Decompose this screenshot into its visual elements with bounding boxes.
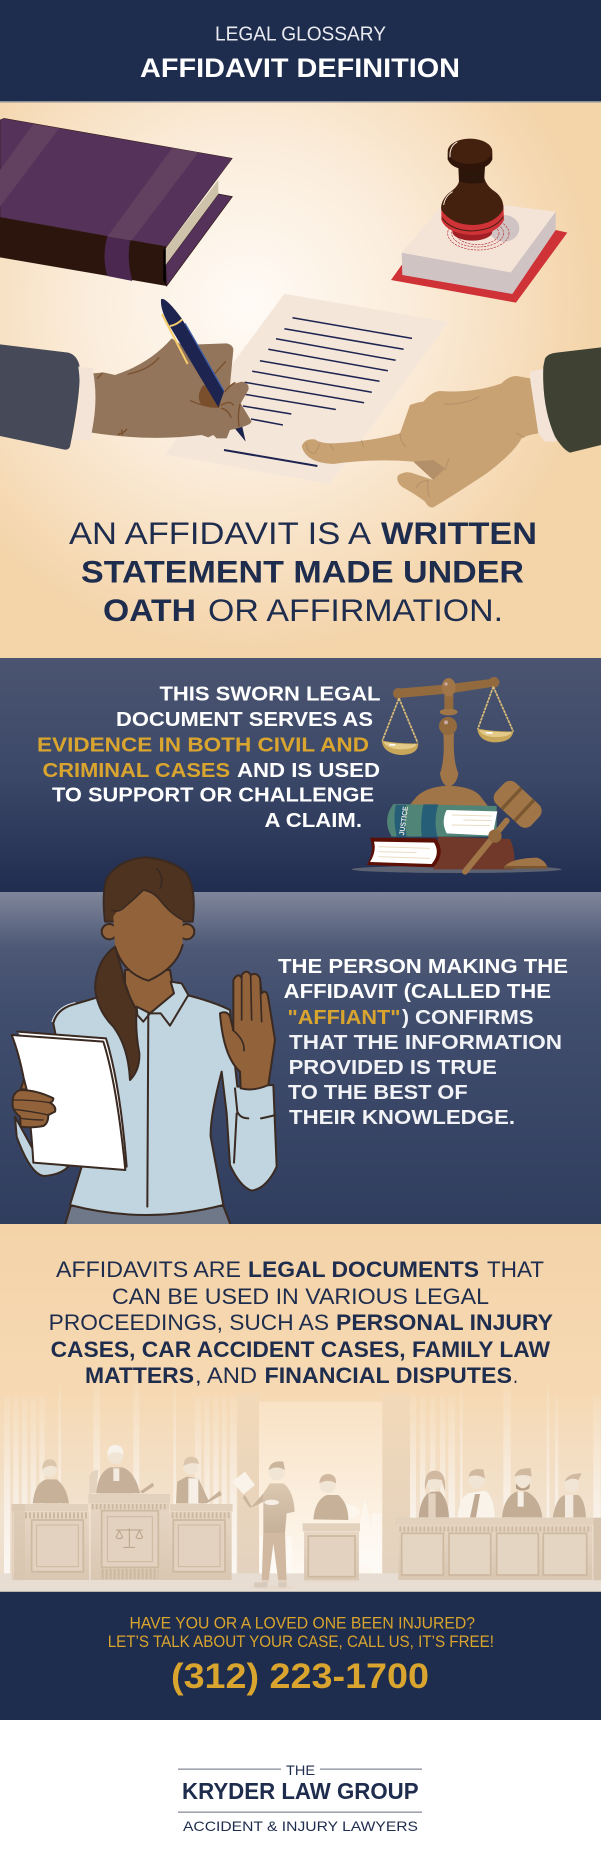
icon: pointing hand xyxy=(302,347,601,507)
statement text: STATEMENT MADE UNDER xyxy=(81,554,524,590)
illustration: courtroom xyxy=(0,1383,601,1592)
text block: the affiant: ) xyxy=(402,1006,409,1029)
statement text: OATH xyxy=(103,592,196,628)
text block: uses of affidavits: PROCEEDINGS, SUCH AS xyxy=(49,1310,329,1335)
text block: sworn document xyxy=(37,683,380,832)
text block: sworn document: DOCUMENT SERVES AS xyxy=(116,708,373,731)
panel: footer logo xyxy=(0,1720,601,1875)
text block: the affiant: THAT THE INFORMATION xyxy=(289,1031,562,1054)
logo: the kryder law group: ACCIDENT & INJURY LAWYERS xyxy=(183,1818,418,1834)
text block: uses of affidavits: AFFIDAVITS ARE xyxy=(56,1257,241,1282)
text block: sworn document: THIS SWORN LEGAL xyxy=(160,683,380,706)
courtroom architecture xyxy=(0,1383,601,1592)
text block: uses of affidavits: THAT xyxy=(487,1257,544,1282)
icon: scales of justice, books and gavel xyxy=(352,677,562,873)
cta invitation: LET’S TALK ABOUT YOUR CASE, CALL US, IT’S FREE! xyxy=(108,1632,494,1651)
text block: uses of affidavits: CASES, CAR ACCIDENT CASES, FAMILY LAW xyxy=(51,1337,551,1362)
text block: uses of affidavits: , AND xyxy=(195,1363,257,1388)
statement text: OR AFFIRMATION. xyxy=(208,592,503,628)
icon: purple book xyxy=(0,118,232,286)
panel: legal proceedings and courtroom xyxy=(0,1224,601,1592)
text block: the affiant xyxy=(278,955,568,1129)
text block: uses of affidavits: CAN BE USED IN VARIOUS LEGAL xyxy=(112,1284,489,1309)
text block: the affiant: THEIR KNOWLEDGE. xyxy=(289,1106,515,1129)
text block: the affiant: PROVIDED IS TRUE xyxy=(289,1056,497,1079)
text block: the affiant: TO THE BEST OF xyxy=(288,1081,468,1104)
text block: sworn document: A CLAIM. xyxy=(264,809,362,832)
panel: sworn legal document xyxy=(0,658,601,892)
logo: the kryder law group xyxy=(178,1762,422,1834)
witness stand and jury xyxy=(303,1468,601,1582)
icon: hand writing with pen xyxy=(0,299,252,450)
text block: the affiant: AFFIDAVIT (CALLED THE xyxy=(284,980,551,1003)
title: AFFIDAVIT DEFINITION xyxy=(140,53,460,83)
text block: uses of affidavits: FINANCIAL DISPUTES xyxy=(264,1363,512,1388)
text block: sworn document: EVIDENCE IN BOTH CIVIL AND xyxy=(37,734,369,757)
panel: signing the affidavit xyxy=(0,101,601,658)
text block: the affiant: THE PERSON MAKING THE xyxy=(278,955,568,978)
judge bench xyxy=(12,1494,233,1581)
statement text: AN AFFIDAVIT IS A xyxy=(69,515,372,551)
header band xyxy=(0,0,601,102)
statement text: WRITTEN xyxy=(381,515,537,551)
text block: sworn document: TO SUPPORT OR CHALLENGE xyxy=(52,784,374,807)
header kicker: LEGAL GLOSSARY xyxy=(215,24,386,46)
document xyxy=(165,294,448,484)
panel: call to action xyxy=(0,1592,601,1720)
cta question: HAVE YOU OR A LOVED ONE BEEN INJURED? xyxy=(130,1614,475,1632)
court staff and judge xyxy=(33,1445,222,1503)
text block: uses of affidavits: LEGAL DOCUMENTS xyxy=(248,1257,479,1282)
text block: uses of affidavits: MATTERS xyxy=(85,1363,194,1388)
logo: the kryder law group: THE xyxy=(286,1762,315,1778)
text block: sworn document: AND IS USED xyxy=(237,759,380,782)
text block: sworn document: CRIMINAL CASES xyxy=(42,759,230,782)
text block: the affiant: CONFIRMS xyxy=(415,1006,534,1029)
icon: woman raising hand holding document xyxy=(12,857,277,1225)
icon: rubber stamp xyxy=(391,139,567,303)
statement text xyxy=(69,515,537,628)
text block: uses of affidavits xyxy=(49,1257,553,1388)
logo: the kryder law group: KRYDER LAW GROUP xyxy=(182,1778,419,1804)
phone number: (312) 223-1700 xyxy=(171,1657,429,1696)
standing lawyer xyxy=(232,1461,295,1589)
text block: uses of affidavits: . xyxy=(513,1363,518,1388)
text block: uses of affidavits: PERSONAL INJURY xyxy=(336,1310,553,1335)
panel: the affiant xyxy=(0,857,601,1225)
text block: the affiant: "AFFIANT" xyxy=(288,1006,400,1029)
label: justice: JUSTICE xyxy=(397,806,410,836)
